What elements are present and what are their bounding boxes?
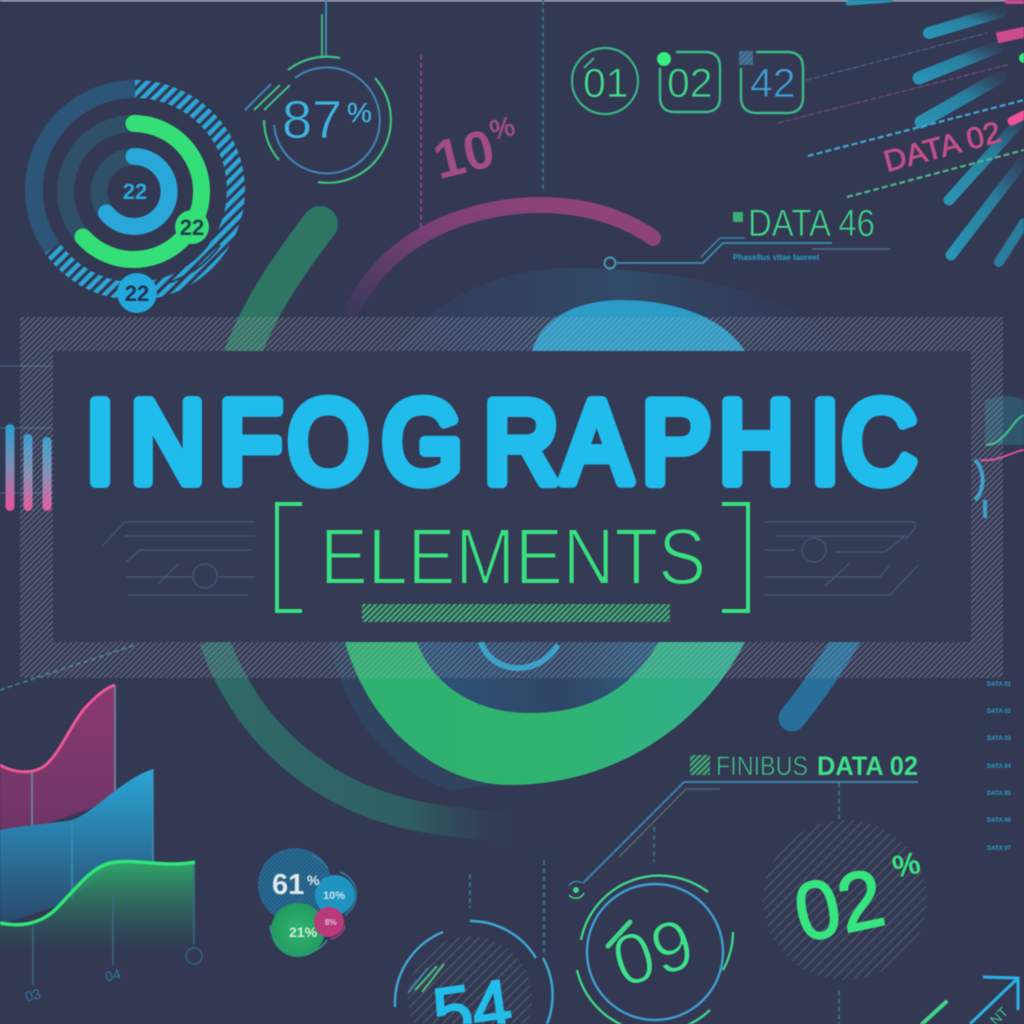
faint blue dome: [395, 268, 850, 351]
circuit decorations: [103, 522, 918, 595]
data legend list: [987, 682, 1012, 852]
decorative big circle arcs behind banner: [214, 205, 858, 832]
gauge 87%: %: [347, 97, 372, 128]
title: INFOGRAPHIC: [86, 378, 916, 507]
dark shadow behind crescent: [330, 642, 500, 790]
green badge: [175, 210, 209, 244]
right circuit lines: [764, 522, 918, 595]
stat 10%: 10: [428, 118, 500, 191]
left circuit lines: [103, 522, 255, 595]
data legend list: DATA 02: [987, 709, 1012, 715]
bubble chart: 21%: [289, 924, 318, 940]
axis labels: [23, 965, 123, 1005]
bubble chart: 61: [272, 869, 304, 901]
data legend list: DATA 03: [987, 736, 1012, 742]
label: data 02: DATA 02: [880, 116, 1005, 179]
badge 42: 42: [750, 60, 796, 106]
left bracket: [277, 504, 302, 611]
blue area: [0, 769, 153, 925]
stat 10%: [427, 110, 526, 191]
axis labels: 04: [103, 965, 123, 985]
arrow bottom right: [922, 977, 1018, 1024]
banner inner panel: [53, 351, 971, 642]
data legend list: DATA 05: [987, 791, 1012, 797]
callout: finibus data 02: [569, 751, 918, 898]
green crescent: [345, 642, 745, 785]
data legend list: DATA 04: [987, 764, 1012, 770]
axis labels: 03: [23, 985, 43, 1005]
left bar chart: [0, 366, 53, 511]
subtitle: ELEMENTS: [320, 512, 706, 601]
gauge 09: [577, 876, 733, 1024]
badge 42: [739, 51, 803, 113]
outer ring: [34, 89, 135, 248]
bubble chart: [258, 848, 356, 957]
gauge 09: 09: [603, 903, 703, 1003]
bubble chart: %: [307, 872, 320, 888]
badge 01: 01: [583, 60, 629, 106]
area chart: [0, 685, 202, 1005]
blue dome: [532, 300, 745, 351]
blue badge: 22: [125, 281, 149, 306]
pink arc: [352, 205, 653, 310]
callout: data 46: Phasellus vitae laoreet: [733, 253, 820, 262]
thick green arc top: [240, 224, 320, 360]
green area: [0, 862, 195, 960]
badge 02: [657, 52, 720, 112]
bubble chart: 8%: [325, 918, 337, 927]
ring chart: [34, 89, 236, 313]
thick green arc bottom: [214, 640, 540, 832]
callout: finibus data 02: FINIBUS: [716, 751, 808, 781]
bubble chart: 10%: [323, 890, 345, 902]
data legend list: DATA 07: [987, 846, 1012, 852]
small blue arc: [481, 642, 558, 668]
gauge 54: [395, 921, 553, 1024]
data legend list: DATA 06: [987, 818, 1012, 824]
badge 02: 02: [667, 60, 713, 106]
stat 02%: %: [889, 845, 923, 885]
banner hatched frame: [20, 317, 1003, 678]
blue arc right: [792, 620, 858, 718]
pink area: [0, 685, 115, 840]
inner ring: [99, 156, 134, 213]
crescent hole shade: [417, 642, 659, 713]
callout: data 46: [604, 203, 890, 268]
gauge 87%: 87: [282, 90, 342, 150]
center value: 22: [123, 179, 147, 204]
gauge 87%: [245, 0, 391, 183]
callout: finibus data 02: DATA 02: [817, 751, 918, 781]
badge 01: [572, 48, 638, 114]
blue badge: [117, 273, 157, 313]
sunburst rays: [778, 0, 1024, 262]
subtitle hatched bar: [362, 604, 670, 622]
green badge: 22: [180, 215, 204, 240]
right bracket: [722, 504, 748, 611]
middle ring: [66, 123, 134, 237]
stat 10%: %: [486, 110, 518, 146]
stat 02%: 02: [787, 852, 892, 960]
stat 02%: [763, 820, 927, 980]
data legend list: DATA 01: [987, 682, 1012, 688]
right mini chart: [975, 396, 1024, 518]
callout: data 46: DATA 46: [748, 203, 875, 245]
